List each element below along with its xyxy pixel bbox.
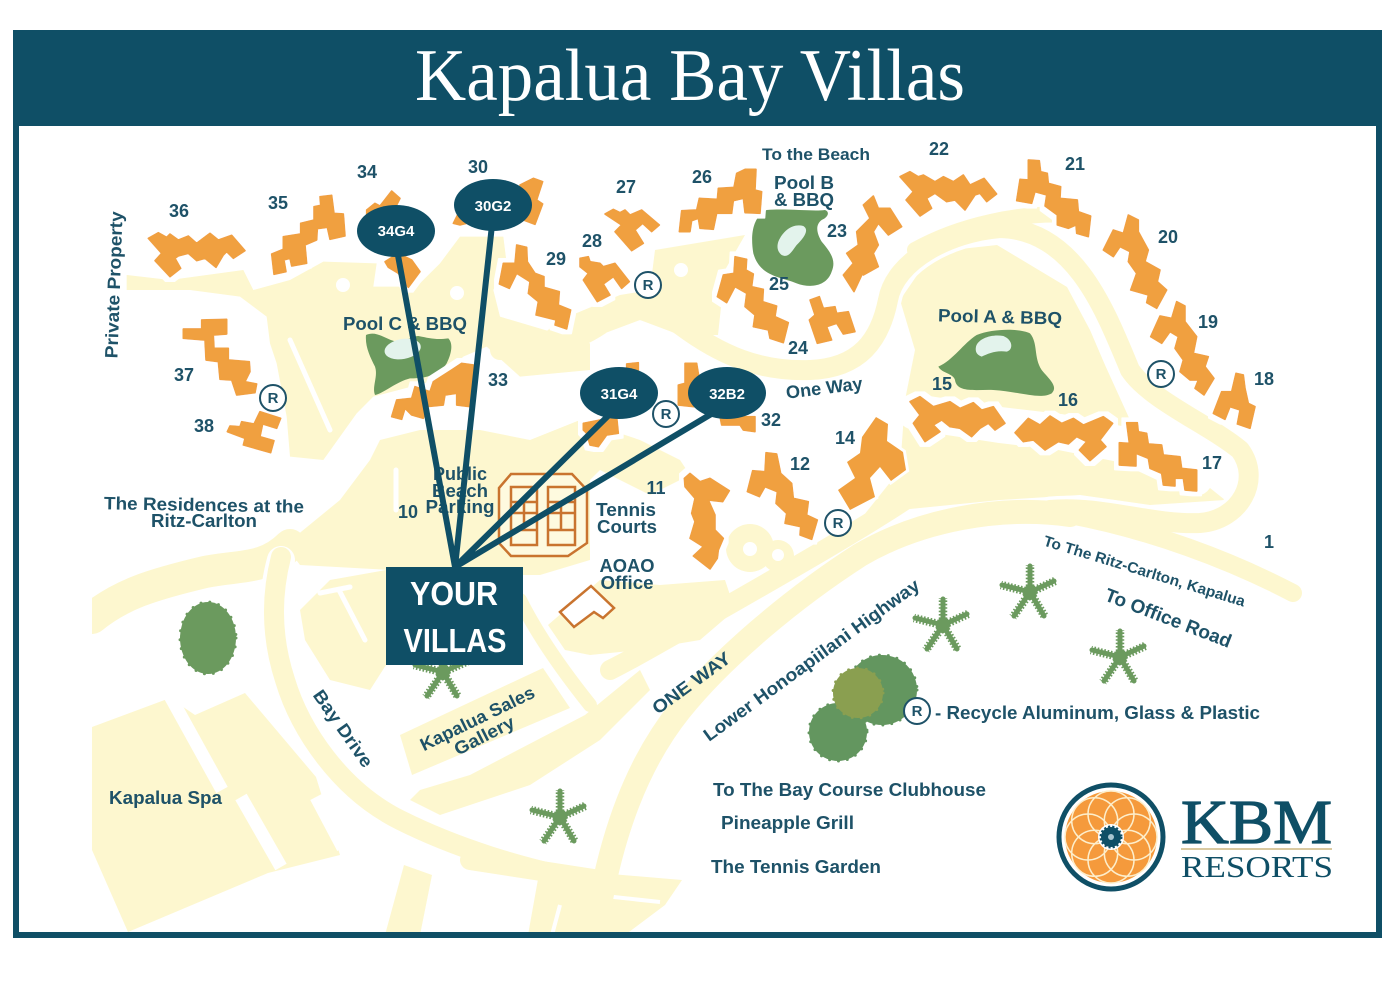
villa numbers <box>169 139 1274 552</box>
villa numbers: 34 <box>357 162 377 182</box>
connector lines <box>397 225 718 567</box>
villa numbers: 38 <box>194 416 214 436</box>
tennis courts <box>499 474 587 556</box>
villa marker 32B2 <box>688 367 766 419</box>
pool B <box>752 210 833 286</box>
recycle markers: R <box>833 515 844 532</box>
villa numbers: 12 <box>790 454 810 474</box>
villa marker 31G4 <box>580 367 658 419</box>
pool C <box>366 334 451 395</box>
recycle markers: R <box>661 406 672 423</box>
map labels <box>101 139 1274 877</box>
villa numbers: 20 <box>1158 227 1178 247</box>
your villas box: VILLAS <box>404 622 506 659</box>
pool A label: Pool A & BBQ <box>938 305 1062 329</box>
highway label: Lower Honoapiilani Highway <box>700 575 923 745</box>
spa label: Kapalua Spa <box>109 788 223 808</box>
tennis garden label: The Tennis Garden <box>711 857 881 877</box>
villa marker 30G2 <box>454 179 532 231</box>
header bar <box>13 30 1382 126</box>
villa numbers: 35 <box>268 193 288 213</box>
villa numbers: 25 <box>769 274 789 294</box>
residences label <box>104 493 304 531</box>
villa numbers: 22 <box>929 139 949 159</box>
villa marker 31G4: 31G4 <box>601 386 638 403</box>
tree west <box>180 602 236 674</box>
residences label: Ritz-Carlton <box>151 511 257 531</box>
villa numbers: 23 <box>827 221 847 241</box>
villa building 14 <box>838 417 906 510</box>
logo subtitle: RESORTS <box>1181 849 1333 884</box>
public beach parking label: Public <box>433 464 487 484</box>
villa numbers: 27 <box>616 177 636 197</box>
villa buildings west <box>148 178 571 453</box>
office road label: To Office Road <box>1102 585 1234 653</box>
one way road label: ONE WAY <box>648 648 735 718</box>
tennis courts label: Tennis <box>596 500 656 520</box>
pool B label: Pool B <box>774 173 834 193</box>
sales gallery label: Gallery <box>451 712 518 759</box>
residences label: The Residences at the <box>104 493 304 517</box>
villa buildings south <box>684 453 817 569</box>
palm trees <box>414 565 1145 842</box>
recycle markers: R <box>268 390 279 407</box>
villa marker 30G2: 30G2 <box>475 198 511 215</box>
villa numbers: 30 <box>468 157 488 177</box>
ritz direction label: To The Ritz-Carlton, Kapalua <box>1041 533 1248 611</box>
pineapple grill label: Pineapple Grill <box>721 813 854 833</box>
your villas box <box>386 567 523 665</box>
one way label: One Way <box>785 373 864 403</box>
pool A <box>938 330 1054 396</box>
recycle markers <box>260 272 1174 724</box>
villa marker 34G4: 34G4 <box>378 223 415 240</box>
logo wordmark: KBM <box>1181 789 1332 857</box>
villa buildings east <box>1015 160 1255 491</box>
bay drive label: Bay Drive <box>309 686 377 771</box>
to the beach label: To the Beach <box>762 145 870 164</box>
public beach parking label: Parking <box>426 497 494 517</box>
clubhouse label: To The Bay Course Clubhouse <box>713 780 986 800</box>
villa numbers: 16 <box>1058 390 1078 410</box>
pools <box>366 210 1054 396</box>
tennis courts label <box>596 500 657 537</box>
villa numbers: 32 <box>761 410 781 430</box>
villa numbers: 28 <box>582 231 602 251</box>
trees <box>180 602 917 761</box>
villa numbers: 29 <box>546 249 566 269</box>
recycle legend: - Recycle Aluminum, Glass & Plastic <box>935 703 1260 723</box>
villa numbers: 19 <box>1198 312 1218 332</box>
private property label: Private Property <box>101 211 127 359</box>
pool B label: & BBQ <box>774 190 834 210</box>
villa numbers: 17 <box>1202 453 1222 473</box>
KBM resorts logo <box>1059 785 1333 889</box>
villa numbers: 33 <box>488 370 508 390</box>
villa numbers: 11 <box>646 478 666 498</box>
villa numbers: 21 <box>1065 154 1085 174</box>
sales gallery label: Kapalua Sales <box>417 682 538 755</box>
villa numbers: 18 <box>1254 369 1274 389</box>
tree cluster <box>809 655 917 761</box>
AOAO office label: AOAO <box>600 556 654 576</box>
logo emblem <box>1059 785 1163 889</box>
public beach parking label <box>426 464 494 517</box>
villa numbers: 26 <box>692 167 712 187</box>
road network <box>92 215 1293 935</box>
recycle markers: R <box>1156 366 1167 383</box>
AOAO office label <box>600 556 654 593</box>
logo rule <box>1181 848 1332 850</box>
recycle markers: R <box>643 277 654 294</box>
pool C label: Pool C & BBQ <box>343 314 467 334</box>
villa numbers: 36 <box>169 201 189 221</box>
villa buildings central <box>580 169 1005 447</box>
villa marker 32B2: 32B2 <box>709 386 745 403</box>
villa numbers: 14 <box>835 428 855 448</box>
AOAO office label: Office <box>600 573 654 593</box>
your villas box: YOUR <box>410 575 498 612</box>
villa numbers: 37 <box>174 365 194 385</box>
villa numbers: 24 <box>788 338 808 358</box>
villa numbers: 15 <box>932 374 952 394</box>
pool B label <box>774 173 834 210</box>
tennis courts label: Courts <box>597 517 657 537</box>
villa marker 34G4 <box>357 205 435 257</box>
title: Kapalua Bay Villas <box>415 35 965 117</box>
AOAO office building <box>560 586 614 627</box>
villa numbers: 1 <box>1264 532 1274 552</box>
villa numbers: 10 <box>398 502 418 522</box>
recycle markers: R <box>912 703 923 720</box>
public beach parking label: Beach <box>432 481 488 501</box>
